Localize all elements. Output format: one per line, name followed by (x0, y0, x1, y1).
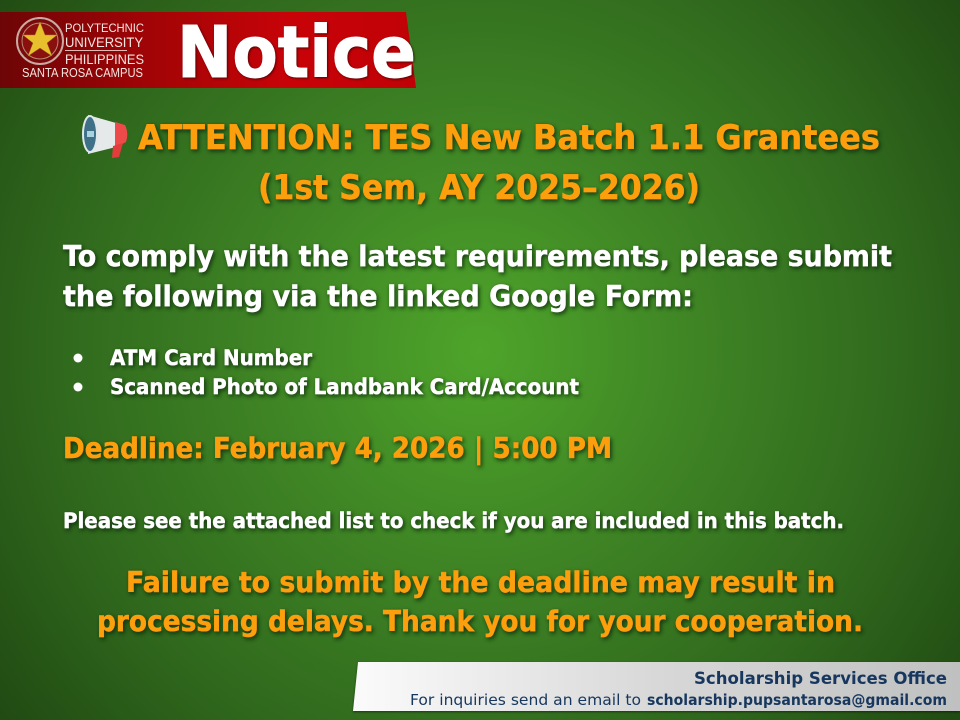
header banner (0, 11, 416, 94)
footer shape (353, 662, 960, 711)
university name: UNIVERSITY (65, 34, 144, 50)
intro text: the following via the linked Google Form: (63, 280, 693, 313)
title: (1st Sem, AY 2025–2026) (258, 168, 700, 208)
list note: Please see the attached list to check if you are included in this batch. (63, 509, 844, 534)
footer panel (353, 662, 960, 711)
title (138, 118, 880, 208)
university name (22, 23, 144, 80)
university name: SANTA ROSA CAMPUS (22, 66, 143, 80)
office name: Scholarship Services Office (694, 669, 947, 689)
red banner shape (0, 12, 416, 88)
intro text (63, 240, 892, 313)
bullet list: Scanned Photo of Landbank Card/Account (110, 375, 579, 400)
bullet list (74, 346, 579, 400)
title: ATTENTION: TES New Batch 1.1 Grantees (138, 118, 880, 158)
logo seal (17, 18, 63, 64)
deadline: Deadline: February 4, 2026 | 5:00 PM (63, 432, 612, 465)
icon: megaphone (83, 115, 127, 158)
closing message (97, 566, 863, 638)
closing message: Failure to submit by the deadline may result in (126, 566, 835, 599)
bullet list: ATM Card Number (110, 346, 312, 371)
inquiry line: For inquiries send an email to (410, 691, 641, 709)
intro text: To comply with the latest requirements, please submit (63, 240, 892, 273)
university name: POLYTECHNIC (65, 23, 144, 35)
university name: PHILIPPINES (65, 52, 144, 67)
Notice heading: Notice (177, 11, 416, 94)
closing message: processing delays. Thank you for your cooperation. (97, 605, 863, 638)
